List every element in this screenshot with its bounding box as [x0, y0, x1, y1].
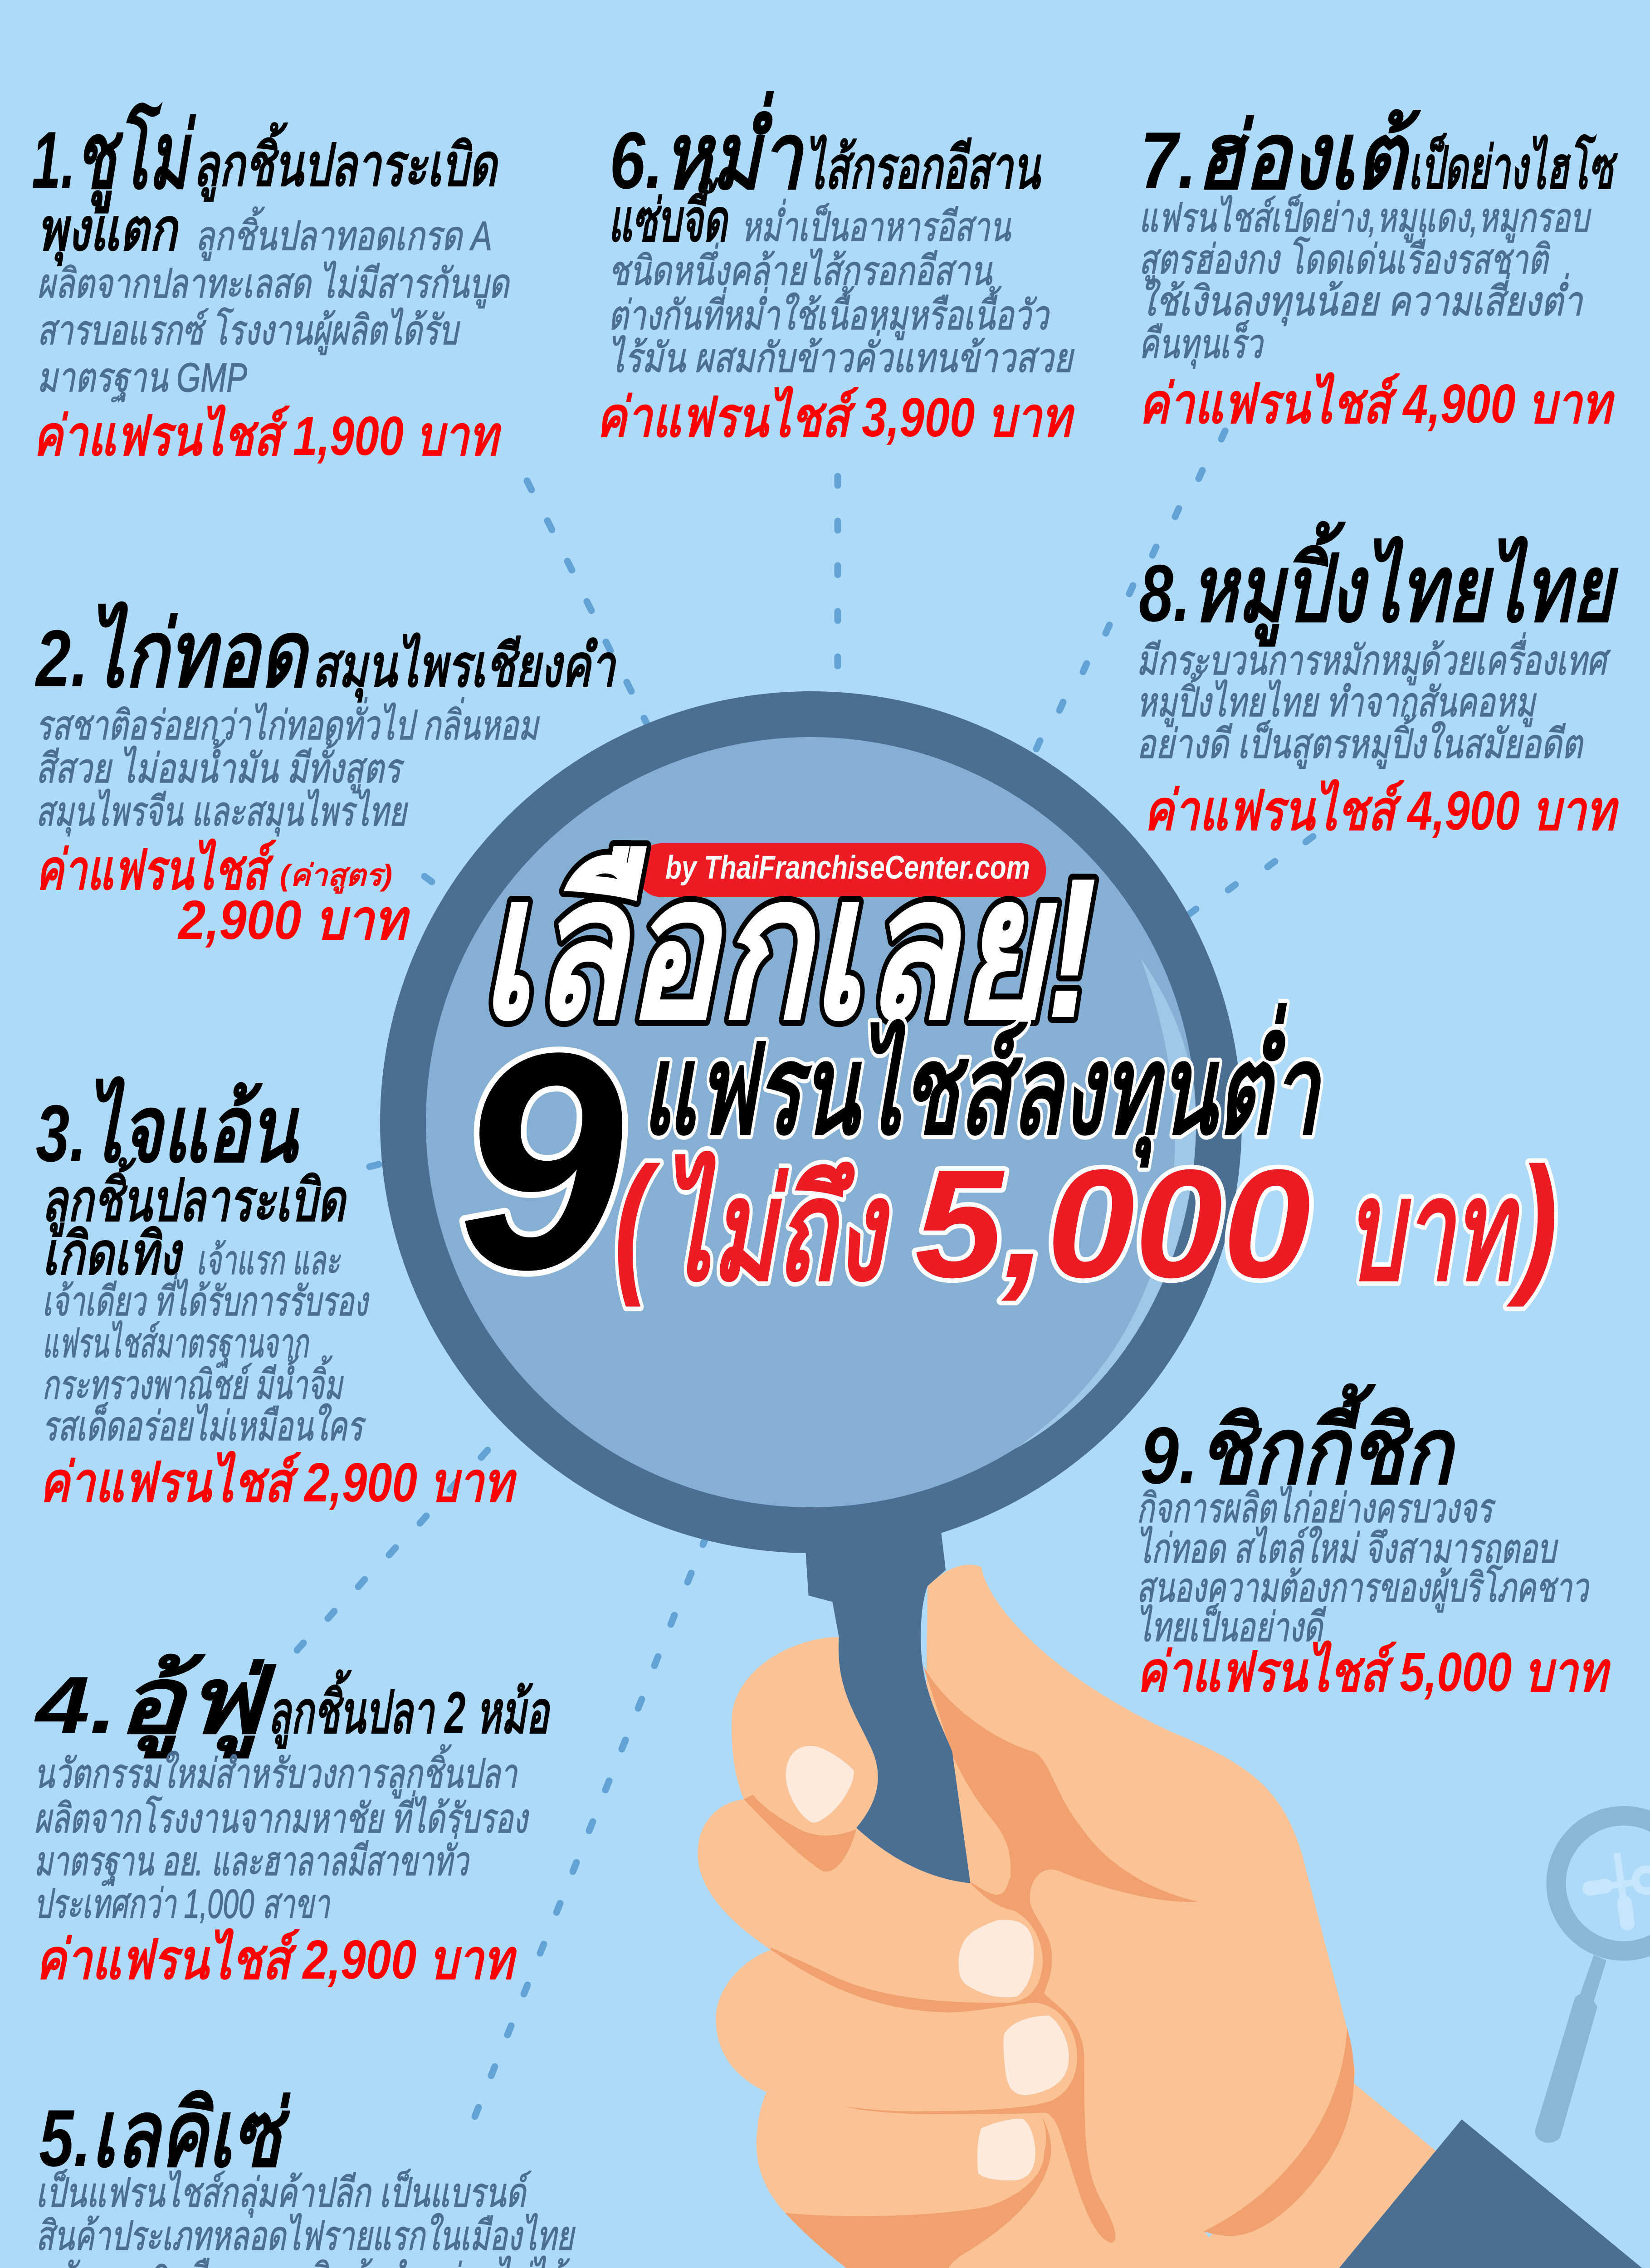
panel: 2 Fried chicken: 2,900 บาท: [177, 889, 410, 951]
panel: 2 Fried chicken: สีสวย ไม่อมน้ำมัน มีทั้งสูตร: [36, 739, 404, 793]
icon: small magnifying glass: [1535, 1816, 1650, 2143]
panel: 3 Jai Aen: กระทรวงพาณิชย์ มีน้ำจิ้ม: [42, 1355, 344, 1408]
panel: 9 Chic Chic: [1137, 1383, 1611, 1703]
title: under 5,000 baht: 5,000: [915, 1138, 1311, 1310]
panel: 2 Fried chicken: 2.ไก่ทอด: [35, 601, 310, 706]
panel: 6 Mum: ต่างกันที่หม่ำใช้เนื้อหมูหรือเนื้อวัว: [608, 286, 1050, 340]
panel: 9 Chic Chic: 9.ชิกกี้ชิก: [1140, 1383, 1456, 1503]
title badge: by ThaiFranchiseCenter.com: [636, 843, 1046, 897]
icon: large magnifying glass: [380, 691, 1242, 1553]
panel: 5 Lakise: เป็นแฟรนไชส์กลุ่มค้าปลีก เป็นแบรนด์: [36, 2169, 532, 2218]
panel: 3 Jai Aen: เจ้าแรก และ: [196, 1238, 341, 1283]
panel: 7 Hong Te: คืนทุนเร็ว: [1139, 320, 1264, 369]
panel: 1 Chumo: ผลิตจากปลาทะเลสด ไม่มีสารกันบูด: [37, 261, 510, 308]
title: under 5,000 baht: ไม่ถึง: [662, 1149, 891, 1309]
panel: 7 Hong Te: 7.ฮ่องเต้: [1140, 104, 1421, 208]
panel: 4 Oo Foo: นวัตกรรมใหม่สำหรับวงการลูกชิ้นปลา: [34, 1744, 518, 1799]
panel: 6 Mum: 6.หม่ำ: [610, 91, 805, 208]
title: under 5,000 baht: (: [614, 1135, 662, 1308]
icon: jacket sleeve: [1177, 2119, 1650, 2268]
panel: 1 Chumo: ลูกชิ้นปลาระเบิด: [193, 122, 499, 202]
panel: 3 Jai Aen: แฟรนไชส์มาตรฐานจาก: [42, 1320, 310, 1368]
panel: 5 Lakise: 5.เลคิเซ่: [39, 2082, 291, 2186]
panel: 6 Mum: ค่าแฟรนไชส์ 3,900 บาท: [596, 386, 1075, 448]
panel: 1 Chumo: พุงแตก: [37, 196, 180, 266]
panel: 1 Chumo: สารบอแรกซ์ โรงงานผู้ผลิตได้รับ: [37, 307, 460, 355]
panel: 1 Chumo: 1.ชูโม่: [32, 102, 196, 214]
title: low-investment franchises: แฟรนไชส์ลงทุนต่ำ: [642, 1002, 1323, 1168]
panel: 2 Fried chicken: [35, 601, 617, 951]
panel: 1 Chumo: ลูกชิ้นปลาทอดเกรด A: [195, 206, 492, 261]
panel: 4 Oo Foo: ลูกชิ้นปลา 2 หม้อ: [268, 1669, 551, 1749]
panel: 4 Oo Foo: มาตรฐาน อย. และฮาลาลมีสาขาทั่ว: [34, 1833, 470, 1886]
panel: 7 Hong Te: [1139, 104, 1618, 435]
panel: 6 Mum: ไร้มัน ผสมกับข้าวคั่วแทนข้าวสวย: [608, 330, 1074, 381]
title: under 5,000 baht: ): [1506, 1135, 1558, 1308]
panel: 6 Mum: แซ่บจี๊ด: [608, 177, 729, 254]
panel: 3 Jai Aen: เจ้าเดียว ที่ได้รับการรับรอง: [42, 1273, 370, 1325]
panel: 6 Mum: ชนิดหนึ่งคล้ายไส้กรอกอีสาน: [608, 243, 993, 294]
panel: 3 Jai Aen: เกิดเทิง: [42, 1221, 184, 1287]
panel: 3 Jai Aen: ค่าแฟรนไชส์ 2,900 บาท: [39, 1451, 517, 1513]
panel: 2 Fried chicken: สมุนไพรเชียงคำ: [312, 632, 617, 703]
icon: magnifier handle: [805, 1532, 970, 1883]
panel: 3 Jai Aen: ลูกชิ้นปลาระเบิด: [41, 1157, 347, 1237]
title: under 5,000 baht: บาท: [1347, 1152, 1521, 1309]
panel: 6 Mum: หม่ำเป็นอาหารอีสาน: [741, 199, 1011, 250]
panel: 2 Fried chicken: (ค่าสูตร): [280, 858, 392, 894]
panel: 4 Oo Foo: ค่าแฟรนไชส์ 2,900 บาท: [36, 1928, 517, 1990]
title: choose now: เลือกเลย!: [479, 837, 1097, 1060]
panel: 4 Oo Foo: ประเทศกว่า 1,000 สาขา: [34, 1882, 331, 1927]
panel: 5 Lakise: [36, 2082, 576, 2268]
panel: 1 Chumo: ค่าแฟรนไชส์ 1,900 บาท: [33, 404, 502, 467]
panel: 2 Fried chicken: รสชาติอร่อยกว่าไก่ทอดทั่วไป กลิ่นหอม: [36, 697, 540, 748]
panel: 4 Oo Foo: ผลิตจากโรงงานจากมหาชัย ที่ได้รับรอง: [34, 1790, 529, 1842]
panel: 1 Chumo: มาตรฐาน GMP: [37, 355, 247, 402]
panel: 2 Fried chicken: ค่าแฟรนไชส์: [36, 838, 277, 901]
panel: 5 Lakise: สินค้าประเภทหลอดไฟรายแรกในเมืองไทย: [36, 2213, 576, 2259]
title: under 5,000 baht: [614, 1135, 1558, 1310]
panel: 9 Chic Chic: ไทยเป็นอย่างดี: [1137, 1603, 1326, 1650]
title badge: by ThaiFranchiseCenter.com: by ThaiFranchiseCenter.com: [665, 850, 1030, 886]
illustration: hand holding magnifying glass: [698, 1532, 1650, 2268]
title: big number 9: 9: [458, 989, 625, 1334]
panel: 8 Thai grilled pork: [1137, 521, 1619, 841]
panel: 3 Jai Aen: รสเด็ดอร่อยไม่เหมือนใคร: [42, 1402, 366, 1449]
panel: 2 Fried chicken: สมุนไพรจีน และสมุนไพรไทย: [36, 789, 408, 836]
panel: 3 Jai Aen: 3.ไจแอ้น: [36, 1076, 300, 1181]
panel: 9 Chic Chic: กิจการผลิตไก่อย่างครบวงจร: [1137, 1486, 1496, 1531]
panel: 6 Mum: [596, 91, 1075, 448]
panel: 1 Chumo: [32, 102, 510, 467]
panel: 4 Oo Foo: [34, 1649, 551, 1990]
panel: 4 Oo Foo: 4.อู้ฟู่: [34, 1649, 277, 1759]
panel: 3 Jai Aen: [36, 1076, 517, 1513]
panel: 6 Mum: ไส้กรอกอีสาน: [805, 134, 1041, 201]
